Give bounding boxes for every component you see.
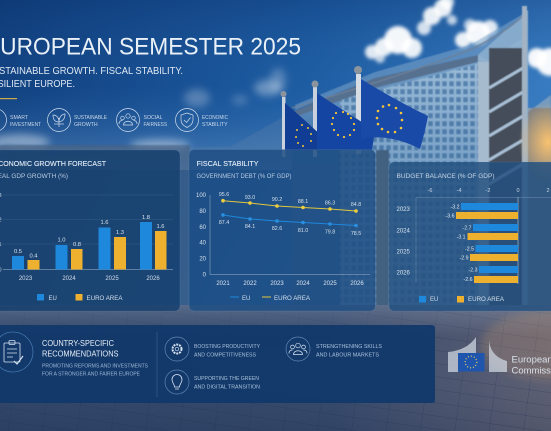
- line chart: government debt: 93.0: [245, 195, 255, 201]
- line chart: government debt: 100: [196, 193, 207, 199]
- horizontal bar chart: budget balance: [396, 188, 551, 284]
- icon: light bulb: [165, 370, 189, 394]
- heading: country-specific recommendations: RECOMMENDATIONS: [42, 350, 119, 358]
- priority labels: SMART: [10, 115, 29, 121]
- legend: EU: [48, 296, 57, 302]
- line chart: government debt: 90.2: [272, 197, 282, 203]
- text: strengthening skills: STRENGTHENING SKILLS: [316, 344, 383, 350]
- line chart: government debt: 81.0: [298, 228, 308, 234]
- icon: social fairness people: [116, 108, 140, 132]
- legend: EURO AREA: [468, 297, 504, 303]
- heading: country-specific recommendations: [42, 339, 119, 358]
- icon: three EU flags on poles: [280, 66, 428, 157]
- panel: budget balance: [389, 162, 551, 311]
- bar chart: GDP growth: 1.8: [142, 215, 150, 221]
- logo: European Commission: [448, 337, 551, 376]
- priority labels: SOCIAL: [144, 115, 163, 121]
- description: [42, 364, 149, 378]
- bar chart: GDP growth: 2025: [105, 276, 119, 282]
- line chart: government debt: 79.8: [325, 230, 335, 236]
- icon: gear: [165, 337, 189, 361]
- horizontal bar chart: budget balance: 0: [516, 188, 520, 194]
- line chart: government debt: 2025: [323, 281, 337, 287]
- line chart: government debt: 88.1: [298, 199, 308, 205]
- horizontal bar chart: budget balance: -3.6: [446, 214, 455, 220]
- legend: [230, 296, 310, 302]
- text: supporting the green: AND DIGITAL TRANSITION: [194, 384, 260, 390]
- description: PROMOTING REFORMS AND INVESTMENTS: [42, 364, 149, 370]
- horizontal bar chart: budget balance: -6: [428, 188, 432, 194]
- divider: [156, 332, 158, 397]
- text: supporting the green: [194, 376, 260, 390]
- gold accent line: [0, 98, 17, 99]
- bar chart: GDP growth: 1.3: [116, 230, 124, 236]
- line chart: government debt: 2022: [243, 281, 257, 287]
- priority labels: SUSTAINABLE: [74, 115, 107, 121]
- legend: [419, 296, 504, 303]
- subheading: government debt: GOVERNMENT DEBT (% OF GDP): [196, 174, 292, 180]
- horizontal bar chart: budget balance: 2025: [396, 250, 411, 256]
- bar chart: GDP growth: 2026: [146, 276, 160, 282]
- heading: budget balance: BUDGET BALANCE (% OF GDP): [396, 174, 494, 180]
- bar chart: GDP growth: 2024: [62, 276, 76, 282]
- line chart: government debt: 2023: [270, 281, 284, 287]
- horizontal bar chart: budget balance: -2.9: [460, 256, 469, 262]
- bar chart: GDP growth: [0, 193, 173, 282]
- horizontal bar chart: budget balance: -3.1: [457, 234, 466, 240]
- horizontal bar chart: budget balance: 2023: [396, 207, 411, 213]
- text: supporting the green: SUPPORTING THE GREEN: [194, 376, 259, 382]
- line chart: government debt: 95.6: [219, 192, 229, 198]
- line chart: government debt: 40: [199, 240, 207, 246]
- priority labels: INVESTMENT: [10, 122, 42, 128]
- priority labels: [10, 115, 228, 128]
- legend: EURO AREA: [274, 296, 310, 302]
- priority labels: GROWTH: [74, 122, 98, 128]
- line chart: government debt: [196, 192, 370, 287]
- text: strengthening skills: [316, 344, 383, 358]
- line chart: government debt: 2026: [350, 281, 364, 287]
- horizontal bar chart: budget balance: 2024: [396, 228, 411, 234]
- icon: sustainable growth leaf: [48, 108, 70, 132]
- line chart: government debt: 84.1: [245, 224, 255, 230]
- horizontal bar chart: budget balance: -2.3: [469, 268, 478, 274]
- horizontal bar chart: budget balance: -4: [457, 188, 461, 194]
- icon: people: [286, 337, 310, 361]
- icon: economic stability shield: [176, 108, 198, 132]
- line chart: government debt: 86.3: [325, 200, 335, 206]
- horizontal bar chart: budget balance: 2: [546, 188, 550, 194]
- horizontal bar chart: budget balance: -2.6: [464, 277, 473, 283]
- priority labels: FAIRNESS: [144, 122, 167, 128]
- legend: EURO AREA: [86, 296, 122, 302]
- subtitle: [0, 65, 183, 90]
- bar chart: GDP growth: 0.5: [14, 249, 22, 255]
- line chart: government debt: 78.5: [351, 231, 361, 237]
- priority labels: STABILITY: [202, 122, 228, 128]
- text: boosting productivity: BOOSTING PRODUCTIVITY: [194, 344, 261, 350]
- horizontal bar chart: budget balance: -3.2: [451, 204, 460, 210]
- panel: fiscal stability: [189, 150, 376, 311]
- icon: smart investment: [0, 108, 6, 132]
- heading: country-specific recommendations: COUNTRY-SPECIFIC: [42, 339, 114, 348]
- line chart: government debt: 87.4: [219, 220, 229, 226]
- line chart: government debt: 2024: [296, 281, 310, 287]
- bar chart: GDP growth: 1.0: [57, 238, 66, 244]
- bar chart: GDP growth: 0.8: [73, 242, 81, 248]
- horizontal bar chart: budget balance: -2.5: [465, 246, 474, 252]
- line chart: government debt: 82.6: [272, 226, 282, 232]
- priority labels: ECONOMIC: [202, 115, 228, 121]
- horizontal bar chart: budget balance: 2026: [396, 270, 411, 276]
- horizontal bar chart: budget balance: -2.7: [463, 226, 472, 232]
- icon: clipboard checklist: [0, 332, 33, 372]
- panel: economic growth forecast: [0, 150, 180, 311]
- priorities row: [0, 108, 198, 132]
- line chart: government debt: 2021: [216, 281, 230, 287]
- line chart: government debt: 84.8: [351, 202, 361, 208]
- bar chart: GDP growth: 1.6: [100, 220, 109, 226]
- bar chart: GDP growth: 0.4: [29, 254, 38, 260]
- description: FOR A STRONGER AND FAIRER EUROPE: [42, 372, 141, 378]
- line chart: government debt: 20: [199, 256, 207, 262]
- text: boosting productivity: AND COMPETITIVENESS: [194, 352, 257, 358]
- text: boosting productivity: [194, 344, 261, 358]
- legend: EU: [430, 297, 438, 303]
- legend: [37, 294, 122, 302]
- horizontal bar chart: budget balance: -2: [486, 188, 490, 194]
- text: strengthening skills: AND LABOUR MARKETS: [316, 352, 380, 358]
- heading: fiscal stability: FISCAL STABILITY: [196, 159, 258, 168]
- panel: country-specific recommendations: [0, 325, 435, 403]
- bar chart: GDP growth: 1.6: [156, 224, 165, 230]
- bar chart: GDP growth: 2023: [19, 276, 33, 282]
- line chart: government debt: 80: [199, 209, 207, 215]
- legend: EU: [242, 296, 250, 302]
- line chart: government debt: 60: [199, 225, 207, 231]
- line chart: government debt: 0: [203, 272, 207, 278]
